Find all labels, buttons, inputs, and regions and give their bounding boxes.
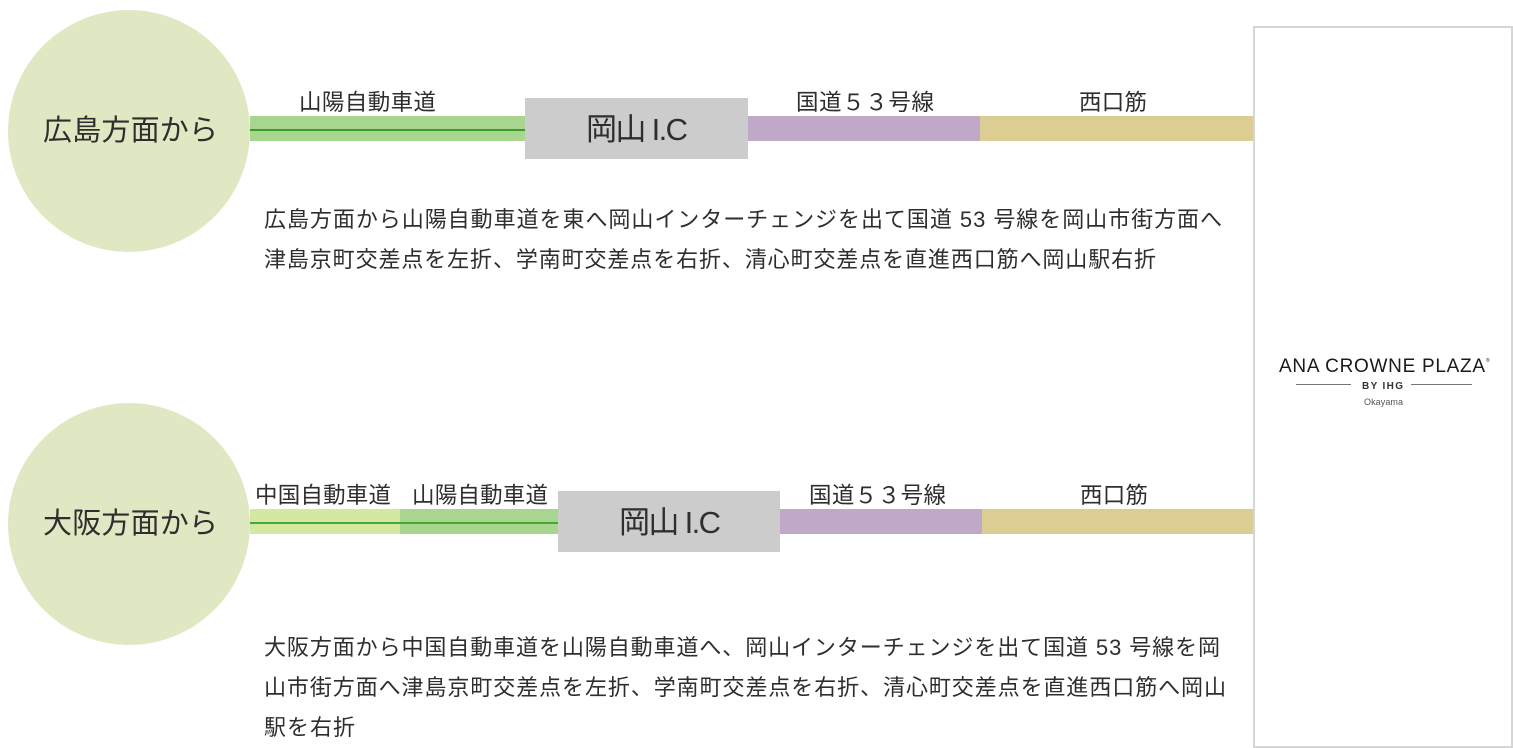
hotel panel: [1254, 27, 1512, 747]
logo: ANA Crowne Plaza: ANA CROWNE PLAZA: [1279, 356, 1485, 377]
road: Route 53: 国道５３号線: [809, 483, 946, 508]
logo: ANA Crowne Plaza: ®: [1486, 357, 1490, 364]
circle: Osaka origin: [8, 403, 250, 645]
road: Sanyo Expressway: 山陽自動車道: [412, 483, 548, 508]
circle: Osaka origin: 大阪方面から: [43, 507, 218, 540]
road: Route 53: [780, 483, 982, 534]
circle: Hiroshima origin: 広島方面から: [43, 114, 218, 147]
logo: ANA Crowne Plaza: BY IHG: [1362, 381, 1403, 392]
road: Route 53: 国道５３号線: [796, 90, 934, 115]
directions text: from Osaka: 大阪方面から中国自動車道を山陽自動車道へ、岡山インターチェンジを出て国道 53 号線を岡: [264, 635, 1220, 660]
road: Nishiguchi-suji: [980, 90, 1253, 141]
logo: ANA Crowne Plaza: Okayama: [1364, 397, 1403, 407]
road: Sanyo Expressway: [250, 90, 526, 141]
route panel: from Hiroshima: [8, 10, 1253, 272]
road: Sanyo Expressway: [400, 483, 558, 534]
directions text: from Hiroshima: 広島方面から山陽自動車道を東へ岡山インターチェンジを出て国道 53 号線を岡山市街方面へ: [264, 207, 1222, 232]
interchange box: Okayama I.C: 岡山 I.C: [619, 505, 721, 540]
road: Nishiguchi-suji: 西口筋: [1080, 483, 1148, 508]
interchange box: Okayama I.C: [558, 491, 780, 552]
road: Nishiguchi-suji: 西口筋: [1079, 90, 1147, 115]
directions text: from Osaka: 駅を右折: [264, 715, 355, 740]
road: Chugoku Expressway: [250, 483, 400, 534]
directions text: from Osaka: [264, 635, 1226, 740]
interchange box: Okayama I.C: 岡山 I.C: [586, 112, 688, 147]
circle: Hiroshima origin: [8, 10, 250, 252]
road: Sanyo Expressway: 山陽自動車道: [299, 90, 436, 115]
route panel: from Osaka: [8, 403, 1253, 740]
directions text: from Osaka: 山市街方面へ津島京町交差点を左折、学南町交差点を右折、清心町交差点を直進西口筋へ岡山: [264, 675, 1226, 700]
interchange box: Okayama I.C: [525, 98, 748, 159]
road: Nishiguchi-suji: [982, 483, 1253, 534]
logo: ANA Crowne Plaza: [1279, 356, 1490, 407]
road: Chugoku Expressway: 中国自動車道: [255, 483, 391, 508]
directions text: from Hiroshima: 津島京町交差点を左折、学南町交差点を右折、清心町交差点を直進西口筋へ岡山駅右折: [264, 247, 1156, 272]
directions text: from Hiroshima: [264, 207, 1222, 272]
road: Route 53: [747, 90, 980, 141]
